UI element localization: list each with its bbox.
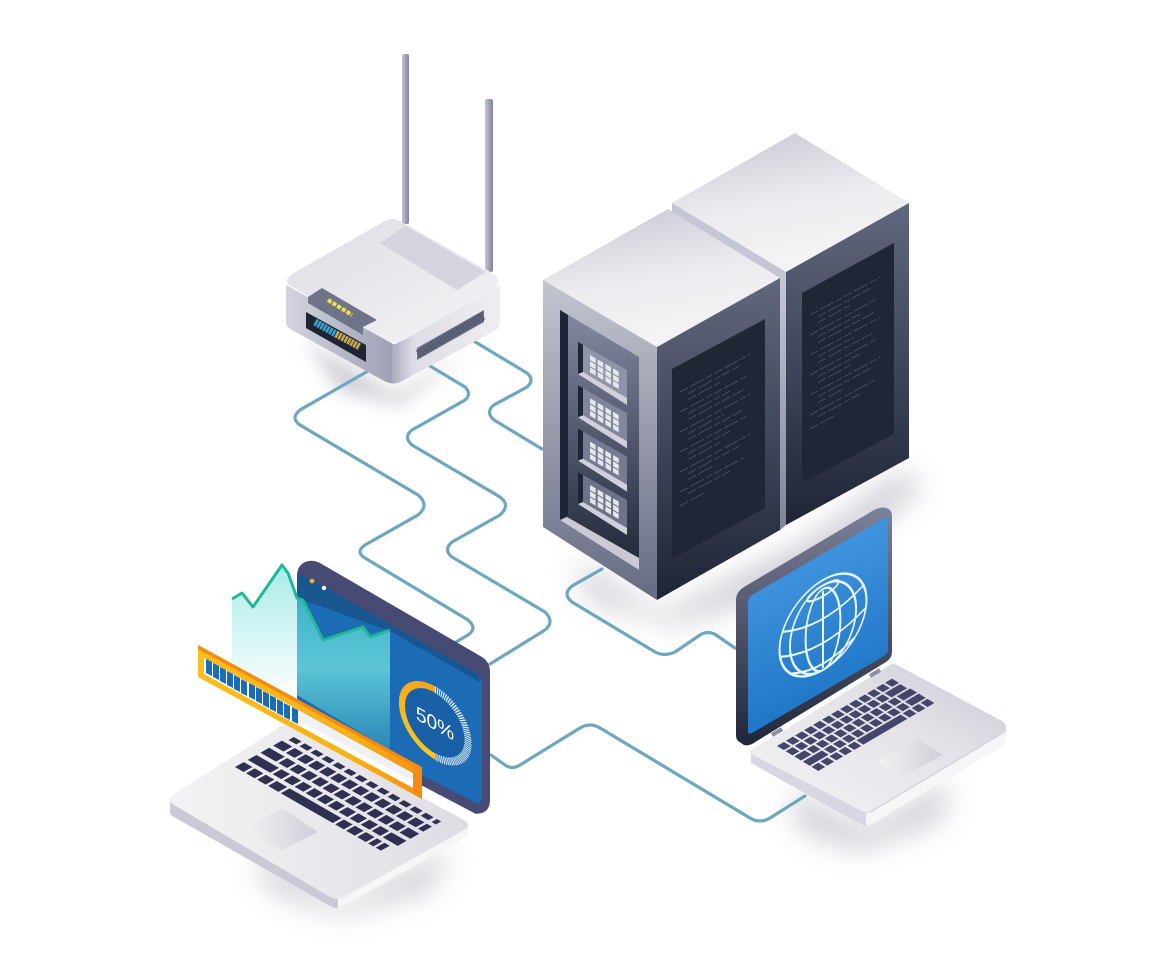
connector strip	[780, 272, 786, 530]
cable: left laptop to right laptop	[491, 725, 805, 821]
gauge disc	[405, 676, 465, 770]
bay slot	[578, 385, 583, 418]
rack top	[543, 209, 780, 347]
window dots	[310, 579, 326, 590]
cables	[295, 340, 805, 821]
top label plate	[380, 226, 486, 290]
side vent	[417, 310, 484, 360]
bay panel	[583, 388, 627, 441]
antenna left	[402, 54, 409, 224]
chart line	[232, 565, 390, 640]
trackpad	[243, 808, 318, 850]
rack back screen	[802, 243, 894, 483]
gauge	[402, 671, 468, 775]
left laptop	[170, 561, 490, 908]
right base edge highlight	[866, 732, 1006, 826]
rack back code lines	[810, 277, 880, 429]
gauge value: 50%	[416, 702, 454, 746]
bay lip	[578, 459, 627, 492]
bay panel	[583, 475, 627, 528]
router	[286, 54, 500, 384]
drive bay 4	[578, 472, 627, 535]
router top	[287, 219, 498, 342]
base top	[750, 664, 1006, 812]
router body	[286, 285, 500, 384]
bay grid	[593, 357, 616, 388]
server rack back	[672, 133, 909, 530]
base edge	[170, 798, 468, 908]
recess lip	[560, 517, 639, 570]
hinges	[772, 670, 880, 735]
bay lip	[578, 415, 627, 448]
screen bezel	[736, 508, 892, 745]
right laptop	[736, 508, 1006, 826]
bay lip	[578, 372, 627, 405]
bay slot	[578, 429, 583, 462]
rack recess	[560, 310, 639, 570]
bar segments	[206, 659, 298, 724]
dot white	[322, 586, 326, 590]
screen display	[297, 574, 482, 803]
base edge right highlight	[338, 822, 468, 908]
cable: server to right laptop	[567, 569, 735, 654]
status panel	[308, 288, 377, 335]
bay slot	[578, 472, 583, 505]
bay grid	[593, 487, 616, 518]
screen display	[748, 517, 888, 734]
gauge ticks	[435, 690, 468, 775]
rack side code lines	[680, 354, 750, 506]
window header	[297, 574, 480, 682]
vent slots	[418, 316, 483, 354]
chart area light	[232, 565, 297, 700]
bar top edge	[198, 645, 422, 771]
recess shade	[560, 310, 568, 520]
cable: router to server	[472, 340, 542, 449]
soft ground shadows	[255, 340, 950, 915]
bay slot	[578, 342, 583, 375]
progress bar	[198, 645, 422, 799]
rack side face	[657, 278, 780, 600]
gauge arc	[402, 671, 435, 756]
bay panel	[583, 345, 627, 398]
rack back side	[786, 203, 909, 525]
keyboard	[239, 737, 438, 851]
icon: globe	[780, 555, 866, 695]
bar frame	[198, 648, 422, 799]
base edge	[751, 727, 1006, 826]
bay lip	[578, 502, 627, 535]
rack side screen	[672, 319, 765, 559]
rack front face	[543, 280, 657, 600]
keyboard	[780, 680, 931, 769]
rack back top	[672, 133, 909, 272]
drive bay 1	[578, 342, 627, 405]
antenna right	[485, 99, 493, 272]
dot amber	[310, 579, 314, 583]
bay panel	[583, 432, 627, 485]
cable: router to left laptop 2	[408, 366, 550, 664]
port recess	[306, 312, 366, 362]
server rack front	[543, 209, 780, 600]
drive bay 2	[578, 385, 627, 448]
screen bezel	[297, 561, 490, 814]
ports amber	[336, 334, 360, 347]
chart area dark	[297, 598, 390, 750]
bar end	[413, 767, 422, 799]
router right side	[392, 285, 500, 383]
trackpad	[877, 739, 943, 777]
base top	[170, 726, 468, 899]
cable: router to left laptop 1	[295, 371, 473, 642]
bay grid	[593, 443, 616, 475]
status lights	[328, 300, 352, 315]
port strip	[315, 322, 360, 347]
rack back lip	[672, 203, 786, 284]
bar glass	[204, 658, 413, 788]
drive bay 3	[578, 429, 627, 492]
ports blue	[315, 322, 336, 334]
bay grid	[593, 400, 616, 431]
